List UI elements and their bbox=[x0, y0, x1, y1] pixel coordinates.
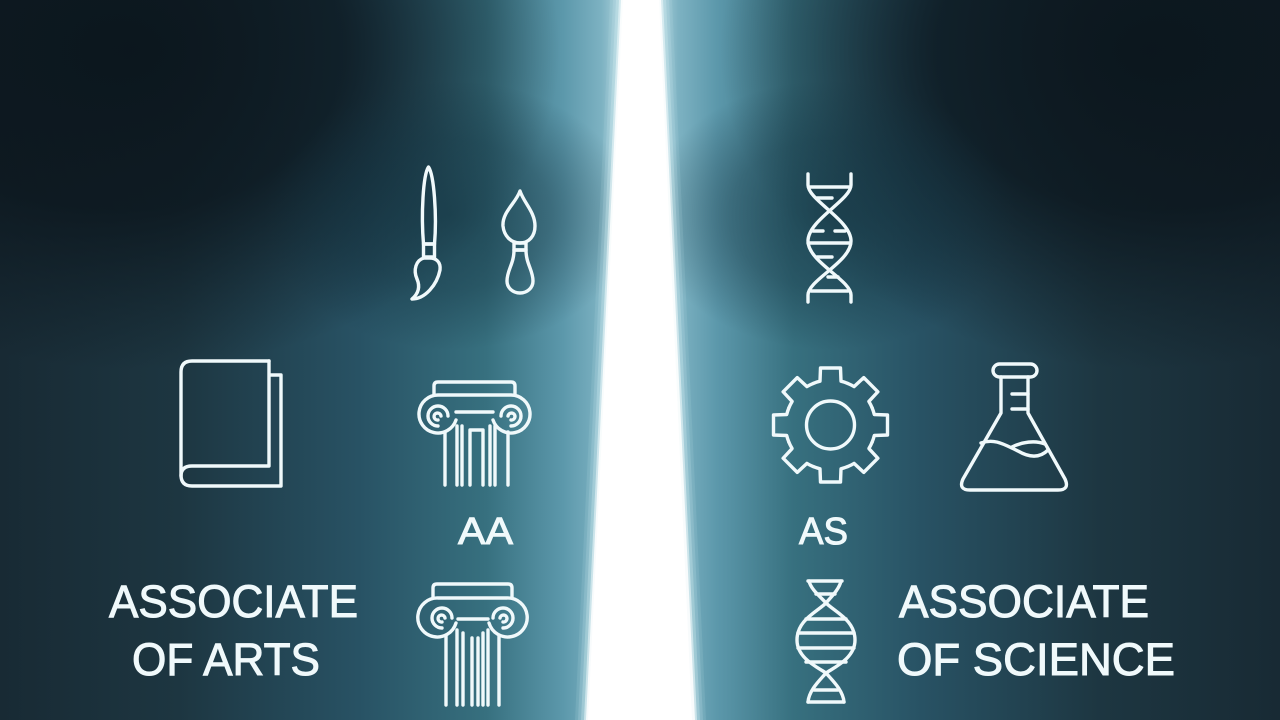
label: AA: AA bbox=[458, 511, 514, 553]
label: ASSOCIATE OF SCIENCE: ASSOCIATE bbox=[899, 576, 1149, 627]
label: ASSOCIATE OF SCIENCE bbox=[897, 576, 1175, 685]
label: ASSOCIATE OF ARTS bbox=[109, 576, 358, 685]
icon: dna helix top bbox=[808, 174, 851, 302]
light beam bbox=[575, 0, 706, 720]
label: ASSOCIATE OF ARTS: OF ARTS bbox=[132, 634, 320, 685]
icon: gear bbox=[774, 368, 888, 482]
icon: flask bbox=[962, 364, 1066, 490]
icon: paintbrush bbox=[412, 167, 440, 299]
label: ASSOCIATE OF SCIENCE: OF SCIENCE bbox=[897, 634, 1175, 685]
label: ASSOCIATE OF ARTS: ASSOCIATE bbox=[109, 576, 358, 627]
icon: ionic column bottom bbox=[418, 584, 527, 705]
icon: ionic column top bbox=[419, 382, 530, 485]
icon: book bbox=[181, 361, 281, 486]
label: AS: AS bbox=[799, 511, 848, 553]
icon: round paintbrush bbox=[503, 191, 535, 293]
icon: dna helix bottom bbox=[797, 581, 855, 702]
